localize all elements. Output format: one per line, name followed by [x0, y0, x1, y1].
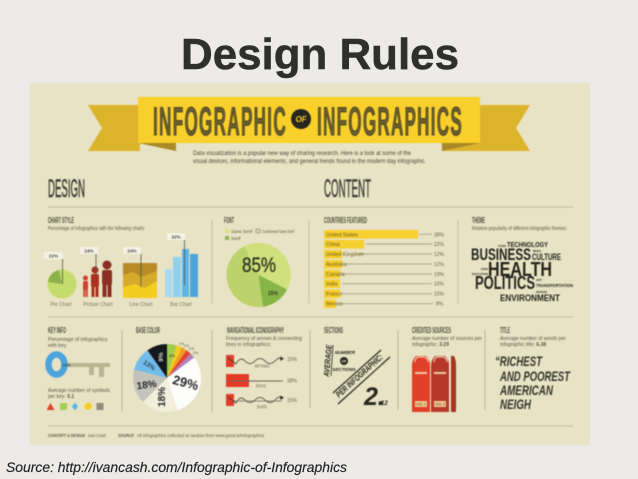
sections typographic graphic: 2. [363, 383, 385, 411]
source line: Source: http://ivancash.com/Infographic-of-Infographics [6, 459, 347, 475]
word cloud: FOOD [498, 244, 507, 248]
subtitle: title: Average number of words per [500, 336, 566, 342]
font legend [225, 229, 295, 241]
subtitle: chart style: Percentage of infographics with the following charts: [48, 226, 145, 232]
arrows row: arrows [254, 364, 270, 370]
line chart: 24% [127, 248, 137, 254]
small slice labels: 2% [193, 351, 198, 355]
arrows row [226, 355, 298, 370]
key average text: per key: 5.1 [48, 394, 74, 400]
panel: base color: BASE COLOR [136, 326, 160, 335]
panel: credited sources [412, 326, 482, 412]
key average text [48, 388, 111, 400]
subtitle: title [500, 336, 566, 348]
subtitle: credited sources [412, 336, 482, 348]
infographic panel [30, 83, 590, 445]
subtitle: title: infographic title: 6.38 [500, 342, 546, 348]
subtitle: key info [48, 337, 108, 349]
chart captions: Line Chart [129, 302, 153, 308]
country bar chart: 38% [434, 232, 445, 238]
banner: INFOGRAPHIC [153, 100, 287, 144]
sample title text: “RICHEST [495, 353, 543, 369]
country bar chart: 12% [434, 252, 445, 258]
bar chart [165, 233, 198, 297]
chart captions: Picture Chart [83, 302, 113, 308]
icon: books: VOL 2 [435, 402, 445, 406]
word cloud: DESIGN [536, 290, 547, 294]
base color pie chart: 9% [158, 352, 165, 362]
footer credits: SOURCE [118, 433, 134, 438]
font legend: Condensed Sans Serif [262, 229, 295, 234]
panel: title: TITLE [500, 326, 510, 335]
small slice labels: 2% [184, 344, 189, 348]
footer credits: CONCEPT & DESIGN [48, 433, 86, 438]
banner OF badge [291, 109, 311, 129]
word cloud: ART [536, 278, 542, 282]
sections typographic graphic: PER INFOGRAPHIC: [334, 352, 385, 399]
sections typographic graphic: AVERAGE [322, 344, 334, 378]
country bar chart: India [326, 282, 338, 288]
panel: base color [133, 326, 201, 412]
base color pie chart: 13% [142, 359, 156, 372]
panel: navigational iconography: NAVIGATIONAL ICONOGRAPHY [227, 326, 284, 335]
sample title text: AND POOREST [499, 368, 571, 384]
country bar chart: 22% [434, 242, 445, 248]
key average text: Average number of symbols [48, 388, 111, 394]
font pie chart: 85% [242, 254, 276, 277]
small slice labels: 2% [179, 342, 184, 346]
banner OF badge: OF [295, 115, 308, 124]
subtitle: key info: with key: [48, 343, 67, 349]
word cloud [471, 242, 574, 304]
footer credits [48, 433, 265, 438]
line chart [123, 247, 157, 298]
title: Design Rules [181, 30, 459, 79]
intro text [193, 151, 426, 165]
lines row: lines [256, 384, 267, 390]
subtitle: navigational iconography [226, 336, 302, 348]
key symbols [46, 402, 104, 410]
word cloud: BUSINESS [471, 245, 531, 264]
panel: key info [46, 326, 111, 410]
pie chart [44, 252, 76, 298]
font pie chart: 15% [268, 291, 279, 297]
both row: 15% [287, 398, 298, 404]
country bar chart: 10% [434, 272, 445, 278]
panel: chart style [44, 216, 198, 308]
lines row [226, 374, 298, 390]
panel: credited sources: CREDITED SOURCES [412, 326, 451, 335]
subtitle: navigational iconography: Frequency of arrows & connecting [226, 336, 302, 342]
word cloud: EDUCATION [472, 272, 488, 276]
both row: both [257, 404, 267, 410]
word cloud: CULTURE [532, 252, 561, 263]
panel: navigational iconography [226, 326, 302, 410]
font legend: Serif [231, 236, 241, 241]
picture chart [80, 247, 112, 297]
sections typographic graphic: NUMBER [335, 350, 356, 355]
word cloud: TECHNOLOGY [507, 242, 548, 249]
country bar chart: 10% [434, 282, 445, 288]
panel: key info: KEY INFO [48, 326, 66, 335]
word cloud: HUMAN [481, 267, 488, 271]
subtitle: theme: Relative popularity of different infographic themes: [472, 226, 567, 232]
font pie chart [226, 243, 290, 307]
banner [88, 97, 530, 151]
word cloud: TRANSPORTATION [536, 283, 574, 288]
panel: sections [322, 326, 390, 411]
subtitle: navigational iconography: lines in infographics: [226, 342, 271, 348]
base color pie chart: 4% [169, 353, 175, 358]
subtitle: credited sources: infographic: 3.29 [412, 342, 449, 348]
country bar chart [324, 230, 445, 308]
base color pie chart: 29% [171, 372, 201, 393]
panel: theme [471, 216, 574, 304]
chart captions: Bar Chart [170, 302, 192, 308]
sample title text [495, 353, 571, 412]
subtitle: credited sources: Average number of sources per [412, 336, 482, 342]
both row [226, 394, 298, 410]
sections typographic graphic: OF [342, 360, 347, 364]
base color pie chart [133, 344, 201, 412]
country bar chart: 8% [436, 302, 444, 308]
chart captions: Pie Chart [51, 302, 72, 308]
country bar chart: 12% [434, 262, 445, 268]
country bar chart: China [326, 242, 340, 248]
word cloud: MEDIA [533, 249, 542, 253]
icon: key: 14% [61, 362, 71, 368]
sample title text: AMERICAN [499, 382, 554, 398]
icon: books: VOL 1 [416, 402, 426, 406]
country bar chart: United States [326, 232, 358, 238]
footer credits: All infographics collected at random from www.good.is/infographics [137, 433, 265, 438]
bar chart: 32% [171, 234, 181, 240]
font legend: Sans Serif [231, 229, 253, 234]
sample title text: NEIGH [500, 396, 532, 412]
base color pie chart: 18% [136, 379, 157, 392]
chart captions [51, 302, 192, 308]
subtitle: key info: Percentage of infographics [48, 337, 108, 343]
pie chart: 22% [49, 254, 58, 258]
infographic panel: DESIGN [48, 175, 85, 203]
intro text: visual devices, informational elements, and general trends found in the modern day infographic. [193, 159, 426, 165]
country bar chart: United Kingdom [326, 252, 364, 258]
word cloud: HEALTH [488, 259, 552, 281]
panel: sections: SECTIONS [324, 326, 343, 335]
sections typographic graphic: SECTIONS [332, 367, 357, 372]
small slice labels [179, 342, 198, 355]
panel: countries featured: COUNTRIES FEATURED [324, 216, 367, 225]
panel: font [224, 216, 295, 307]
panel: title [495, 326, 571, 412]
small slice labels: 2% [189, 347, 194, 351]
country bar chart: 10% [434, 292, 445, 298]
base color pie chart: 18% [157, 387, 168, 407]
panel: theme: THEME [472, 216, 485, 225]
sections typographic graphic [322, 344, 390, 411]
icon: books [412, 356, 456, 412]
panel: font: FONT [224, 216, 234, 225]
country bar chart: Canada [326, 272, 345, 278]
picture chart: 24% [84, 248, 94, 254]
lines row: 38% [287, 378, 298, 384]
panel: countries featured [324, 216, 445, 308]
country bar chart: Mexico [326, 302, 343, 308]
sections typographic graphic: 12 [381, 401, 388, 407]
infographic panel: CONTENT [324, 175, 371, 203]
country bar chart: France [326, 292, 343, 298]
word cloud: POLITICS [475, 273, 535, 293]
intro text: Data visualization is a popular new way of sharing research. Here is a look at some of the [193, 151, 412, 157]
footer credits: Ivan Cash [88, 433, 106, 438]
panel: chart style: CHART STYLE [48, 216, 74, 225]
arrows row: 15% [287, 357, 298, 363]
country bar chart: Australia [326, 262, 347, 268]
word cloud: ENVIRONMENT [500, 293, 560, 304]
